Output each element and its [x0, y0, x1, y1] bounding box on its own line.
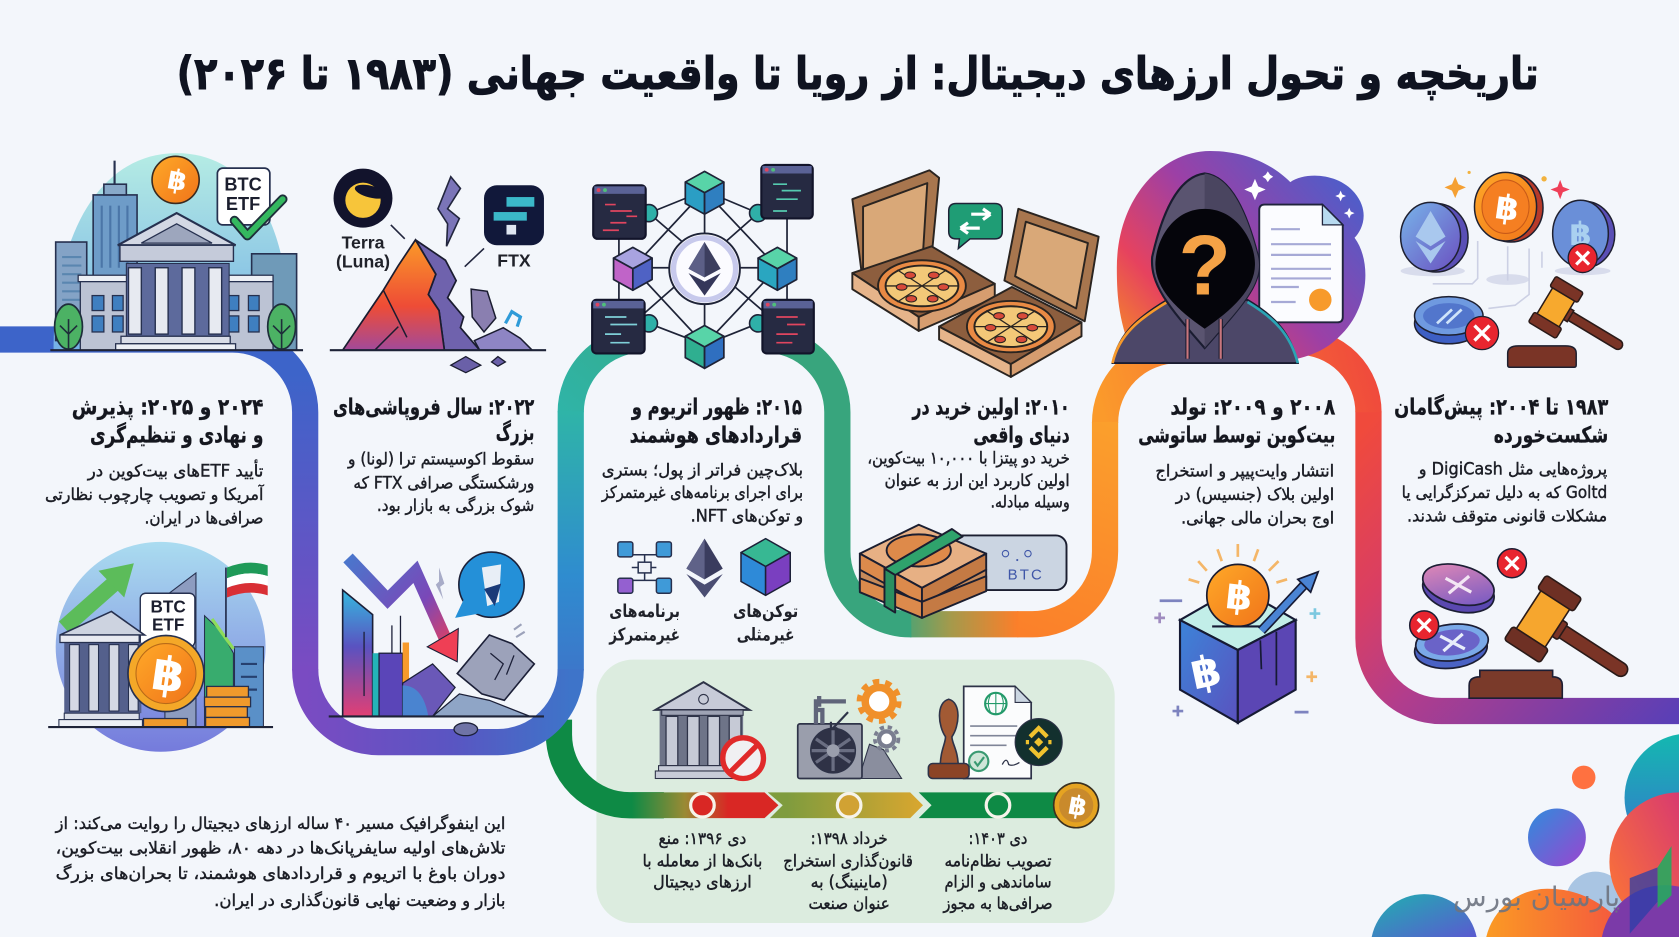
- label: Khordad 1398: قانون‌گذاری استخراج: [783, 851, 913, 871]
- watermark logo: [1453, 846, 1672, 934]
- illustration: Terra and FTX collapse: (Luna): [336, 252, 390, 272]
- illustration: Iran BTC ETF adoption: ETF: [152, 615, 184, 635]
- illustration: Ethereum blockchain network: [592, 165, 814, 368]
- text: 2010: وسیله مبادله.: [990, 493, 1070, 513]
- icon: Ethereum diamond: [686, 539, 723, 598]
- illustration: ETF bank with city: BTC: [224, 175, 262, 195]
- icon: license document, stamp and exchange badge: [928, 686, 1062, 778]
- label: Dey 1396: ارزهای دیجیتال: [653, 873, 752, 893]
- label: Dey 1403: دی ۱۴۰۳:: [969, 829, 1027, 848]
- text: 2024 and 2025: صرافی‌ها در ایران.: [145, 509, 263, 529]
- labels: غیرمتمرکز: [609, 625, 680, 645]
- timeline ribbon: [0, 339, 1679, 742]
- text: 2015: و توکن‌های NFT.: [691, 507, 803, 527]
- illustration: failed early coins and gavel: ฿: [1492, 187, 1522, 230]
- icon: banned bank: [655, 682, 763, 778]
- text: 2015: قراردادهای هوشمند: [630, 422, 802, 448]
- text: 2024 and 2025: آمریکا و تصویب چارچوب نظارتی: [45, 484, 265, 505]
- label: Khordad 1398: عنوان صنعت: [808, 894, 890, 914]
- text: summary paragraph: تلاش‌های اولیه سایفرپانک‌ها در دهه ۸۰، ظهور انقلابی بیت‌کوین،: [56, 838, 506, 858]
- labels: [609, 602, 798, 645]
- icon: bitcoin coin: [1054, 783, 1099, 828]
- text: 2008 and 2009: انتشار وایت‌پیپر و استخراج: [1155, 462, 1334, 482]
- text: 2008 and 2009: بیت‌کوین توسط ساتوشی: [1138, 422, 1335, 448]
- text: summary paragraph: این اینفوگرافیک مسیر ۴۰ ساله ارزهای دیجیتال را روایت می‌کند: از: [55, 814, 505, 834]
- labels: غیرمثلی: [737, 625, 795, 645]
- illustration: hooded anonymous figure with whitepaper: ?: [1178, 217, 1231, 313]
- text: 2010: اولین کاربرد این ارز به عنوان: [884, 471, 1070, 491]
- text: summary paragraph: بازار و وضعیت نهایی قانون‌گذاری در ایران.: [214, 891, 505, 911]
- labels: برنامه‌های: [609, 602, 680, 622]
- text: 1983 to 2004: ۱۹۸۳ تا ۲۰۰۴: پیش‌گامان: [1394, 393, 1609, 420]
- illustration: Terra and FTX collapse: [330, 169, 546, 373]
- illustration: ETF bank with city: [50, 153, 303, 350]
- decorative corner circles: [1372, 734, 1679, 937]
- text: 1983 to 2004: Goltd که به دلیل تمرکزگرایی یا: [1402, 483, 1607, 503]
- label: Dey 1396: [642, 829, 762, 893]
- label: Khordad 1398: خرداد ۱۳۹۸:: [811, 829, 888, 849]
- icon: NFT cube: [741, 539, 790, 595]
- illustration: Terra and FTX collapse: Terra: [342, 232, 385, 252]
- label: Dey 1403: ساماندهی و الزام: [944, 873, 1052, 893]
- text: 1983 to 2004: مشکلات قانونی متوقف شدند.: [1407, 507, 1607, 527]
- icon: exchange speech bubble: [949, 203, 1002, 248]
- label: Dey 1403: تصویب نظام‌نامه: [944, 851, 1052, 871]
- text: 2015: ۲۰۱۵: ظهور اتریوم و: [631, 394, 802, 420]
- text: 2024 and 2025: تأیید ETFهای بیت‌کوین در: [87, 460, 264, 482]
- illustration: Iran BTC ETF adoption: ฿: [148, 646, 188, 705]
- text: 2022: ۲۰۲۲: سال فروپاشی‌های: [333, 394, 535, 420]
- label: Khordad 1398: [783, 829, 913, 914]
- illustration: cube with bitcoin: [1154, 544, 1320, 723]
- text: 2015: برای اجرای برنامه‌های غیرمتمرکز: [601, 483, 803, 503]
- illustration: market crash chart: [329, 552, 544, 736]
- label: Dey 1396: بانک‌ها از معامله با: [642, 851, 762, 871]
- text: 2008 and 2009: اوج بحران مالی جهانی.: [1181, 509, 1334, 529]
- text: 2008 and 2009: اولین بلاک (جنسیس) در: [1175, 485, 1334, 505]
- text: 2008 and 2009: [1138, 394, 1336, 529]
- text: 2024 and 2025: و نهادی و تنظیم‌گری: [90, 421, 263, 448]
- illustration: pizza box stack with BTC card: BTC: [1008, 566, 1044, 583]
- illustration: pizza box stack with BTC card: [860, 525, 1067, 618]
- illustration: cube with bitcoin: ฿: [1186, 645, 1226, 700]
- text: 2022: ورشکستگی صرافی FTX که: [353, 473, 534, 493]
- label: Dey 1403: [942, 829, 1053, 914]
- text: 2010: ۲۰۱۰: اولین خرید در: [912, 394, 1070, 420]
- icon: bitcoin coin: ฿: [1066, 790, 1089, 823]
- text: 2010: [867, 394, 1070, 513]
- text: 2024 and 2025: [45, 394, 265, 529]
- text: 2015: [601, 394, 803, 527]
- text: 2010: دنیای واقعی: [973, 422, 1070, 448]
- text: 1983 to 2004: [1394, 393, 1609, 527]
- icon: mining rig and gears: [798, 682, 902, 778]
- illustration: ETF bank with city: ฿: [165, 162, 190, 198]
- text: 2010: خرید دو پیتزا با ۱۰,۰۰۰ بیت‌کوین،: [867, 449, 1070, 469]
- illustration: Iran BTC ETF adoption: [48, 542, 273, 752]
- text: 1983 to 2004: پروژه‌هایی مثل DigiCash و: [1418, 459, 1608, 479]
- text: 2022: شوک بزرگی به بازار بود.: [377, 496, 534, 516]
- text: summary paragraph: دوران باوغ با اتریوم و قراردادهای هوشمند، تا بحران‌های بزرگ: [56, 863, 505, 884]
- watermark logo: پارسیان بورس: [1453, 882, 1620, 913]
- labels: توکن‌های: [733, 602, 798, 622]
- text: 2022: بزرگ: [496, 419, 534, 446]
- label: Dey 1396: دی ۱۳۹۶: منع: [659, 829, 746, 849]
- icon: dApp nodes: [618, 542, 671, 593]
- illustration: Terra and FTX collapse: FTX: [497, 251, 531, 271]
- lower illustration: gavel and struck coins: [1410, 549, 1648, 706]
- illustration: failed early coins and gavel: [1401, 171, 1636, 370]
- text: 2008 and 2009: ۲۰۰۸ و ۲۰۰۹: تولد: [1170, 394, 1336, 420]
- illustration: ETF bank with city: ETF: [226, 194, 260, 214]
- text: summary paragraph: [55, 814, 506, 911]
- text: 2024 and 2025: ۲۰۲۴ و ۲۰۲۵: پذیرش: [72, 394, 263, 420]
- illustration: hooded anonymous figure with whitepaper: [1113, 151, 1365, 363]
- illustration: Iran BTC ETF adoption: BTC: [151, 597, 186, 617]
- illustration: two pizza boxes: [852, 170, 1099, 377]
- panel: Iran regulation timeline: [559, 660, 1115, 923]
- text: 2015: بلاک‌چین فراتر از پول؛ بستری: [602, 460, 803, 480]
- icon row: decentralized apps, Ethereum, NFT: [609, 539, 798, 645]
- text: 2022: [333, 394, 535, 516]
- text: 1983 to 2004: شکست‌خورده: [1494, 422, 1608, 448]
- illustration: cube with bitcoin: ฿: [1223, 573, 1255, 621]
- timeline bar: [632, 792, 1060, 818]
- text: 2022: سقوط اکوسیستم ترا (لونا) و: [347, 450, 534, 470]
- label: Khordad 1398: (ماینینگ) به: [811, 873, 888, 892]
- illustration: failed early coins and gavel: ฿: [1569, 215, 1592, 253]
- label: Dey 1403: صرافی‌ها به مجوز: [942, 894, 1053, 914]
